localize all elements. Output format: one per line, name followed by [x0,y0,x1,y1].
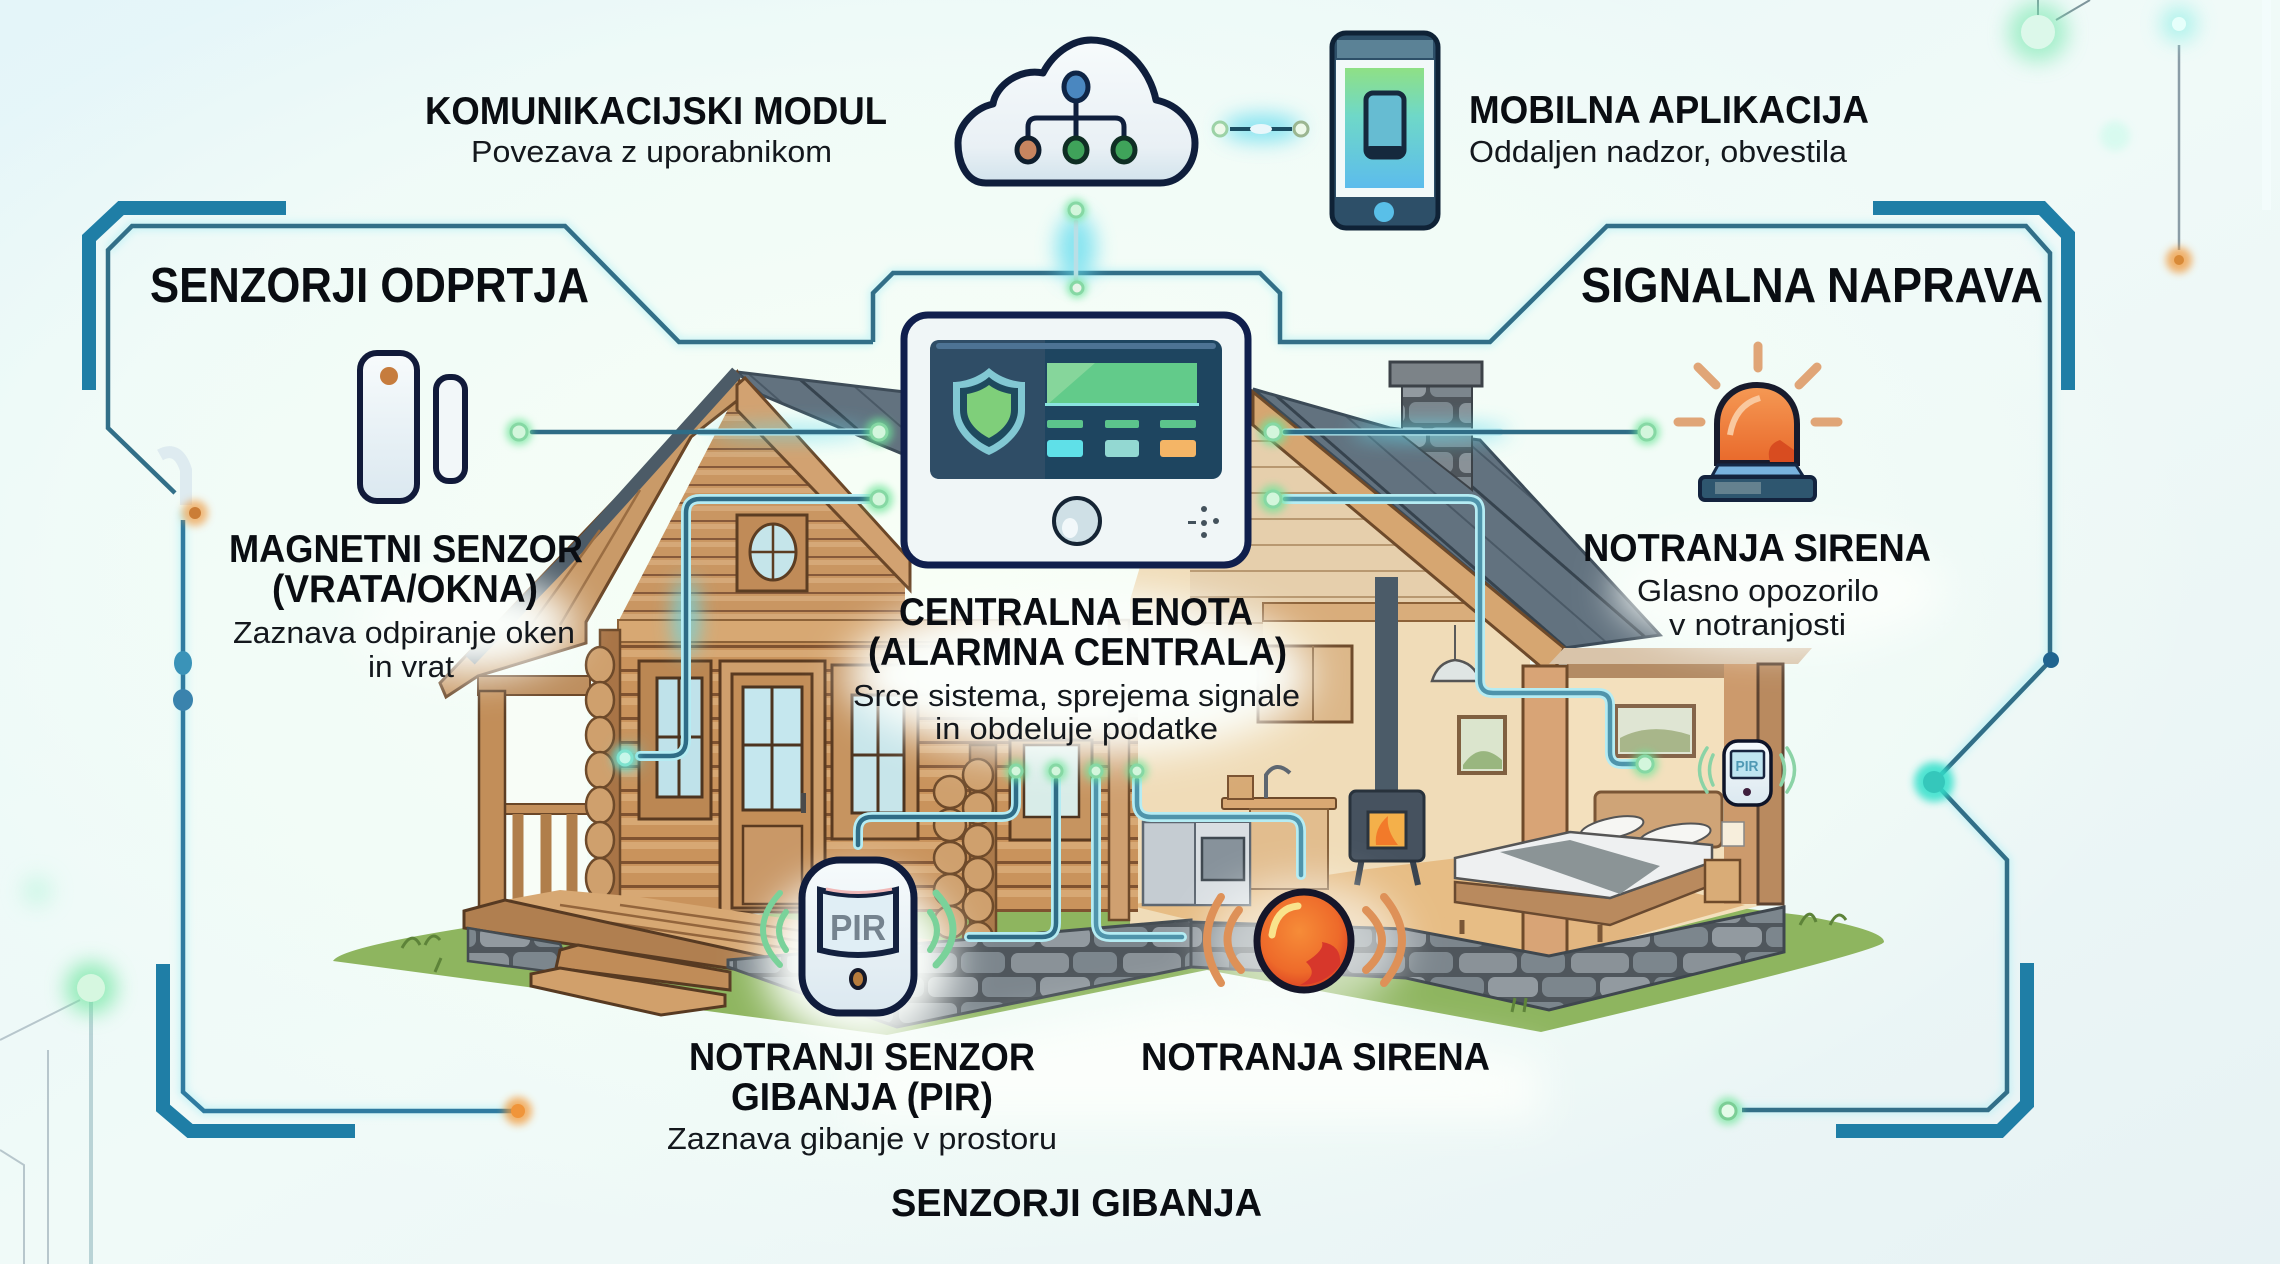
icon: signal siren [1678,346,1838,500]
porch opening [505,691,587,901]
label: interior siren right: v notranjosti [1669,607,1846,642]
right stone foundation [1191,907,1784,1010]
label: interior siren right: NOTRANJA SIRENA [1583,527,1931,570]
floor [1128,850,1523,955]
label: central unit [853,591,1300,746]
bedroom floor [1567,880,1745,955]
picture [1459,717,1505,773]
wall corner post [1109,620,1129,920]
bedroom wall [1567,664,1762,955]
label: central unit: CENTRALNA ENOTA [899,591,1253,634]
frame: thin circuit lines [108,226,2051,1111]
bed [1455,792,1722,942]
icon: magnetic door sensor [360,353,465,501]
kitchen counter [1222,767,1336,889]
eave board [1549,648,1812,664]
label: PIR motion sensor: NOTRANJI SENZOR [689,1036,1035,1079]
speaker dots [1188,506,1219,538]
link between cloud and phone [1213,122,1308,136]
house illustration [333,362,1884,1035]
label: interior siren right [1583,527,1931,642]
log corner centre [934,745,996,960]
label: central unit: (ALARMNA CENTRALA) [868,631,1287,674]
label: PIR motion sensor: GIBANJA (PIR) [731,1076,993,1119]
icon: mobile phone [1332,33,1438,228]
icon: central alarm unit [904,315,1248,565]
frame nodes [160,452,2059,1125]
steps [531,945,730,1015]
gable right rafter [737,378,910,590]
icon: cloud communication module [958,40,1195,183]
grass tufts [402,914,1846,1012]
label: PIR motion sensor [667,1036,1057,1156]
label: interior siren bottom: NOTRANJA SIRENA [1141,1036,1490,1079]
upper cabinet [1258,646,1352,722]
interior back wall [1130,400,1530,940]
icon: PIR motion sensor: PIR [830,907,886,948]
left roof [440,372,905,697]
heading: mobile application: MOBILNA APLIKACIJA [1469,89,1869,132]
oven [1143,822,1250,905]
decorative network: right upper corner [2008,0,2271,273]
chimney [1390,362,1482,490]
heading: mobile application [1469,89,1869,169]
hanging lamp [1432,625,1480,681]
landscape picture [1616,706,1694,756]
porch lintel [478,676,590,695]
wall lintel [618,620,1018,642]
door [720,661,825,912]
label: magnetic sensor [229,528,583,684]
roof rafter [1253,392,1564,676]
porch railing [505,804,587,904]
icon: small PIR sensor: PIR [1736,758,1759,775]
right wall post [1724,664,1783,904]
porch post [479,691,505,908]
grass [333,880,1884,1035]
deck stone base [468,928,570,972]
wire glows [620,114,1510,767]
keypad [1047,420,1196,457]
heading: motion sensors: SENZORJI GIBANJA [891,1182,1262,1225]
label: magnetic sensor: (VRATA/OKNA) [272,568,538,611]
interior upper planks [1190,400,1470,646]
label: magnetic sensor: MAGNETNI SENZOR [229,528,583,571]
front stone foundation [728,920,1191,1027]
gable wall [618,392,905,690]
porch deck [464,890,1000,985]
icon: indoor siren [1207,892,1402,990]
decorative network: left lower corner [0,875,117,1264]
lcd display [1045,363,1199,406]
round attic window [737,515,807,591]
log corner left [586,630,620,900]
horizontal beam [1263,603,1485,621]
wood stove [1350,791,1424,885]
frame: thick corner brackets [89,208,2068,1131]
nightstand [1705,822,1744,902]
heading: mobile application: Oddaljen nadzor, obvestila [1469,134,1848,169]
label: PIR motion sensor: Zaznava gibanje v prostoru [667,1121,1057,1156]
white fog over the house [365,535,1945,1120]
heading: signal device: SIGNALNA NAPRAVA [1581,259,2043,313]
frame: thin circuit line glow [108,226,2050,1111]
label: interior siren right: Glasno opozorilo [1637,573,1879,608]
central post [1523,666,1567,956]
heading: opening sensors: SENZORJI ODPRTJA [150,259,589,313]
label: central unit: in obdeluje podatke [935,711,1218,746]
main log wall [618,640,1138,912]
label: central unit: Srce sistema, sprejema signale [853,678,1300,713]
window right of logs [1010,740,1092,840]
icon: PIR motion sensor [763,860,953,1013]
label: magnetic sensor: in vrat [368,649,454,684]
window centre [832,665,918,839]
knob [1054,498,1100,544]
heading: communication module: Povezava z uporabnikom [471,134,832,169]
wiring: outer light casing [640,432,1640,937]
heading: communication module [425,90,887,169]
heading: communication module: KOMUNIKACIJSKI MODUL [425,90,887,133]
stove pipe [1375,577,1398,791]
wiring: dark core [532,222,1640,937]
right roof [1253,389,1660,648]
label: magnetic sensor: Zaznava odpiranje oken [233,615,575,650]
eave fascia [1567,664,1759,678]
wiring nodes [506,199,1660,782]
shield [953,368,1025,455]
window left [639,661,711,819]
icon: small PIR sensor [1700,741,1794,805]
